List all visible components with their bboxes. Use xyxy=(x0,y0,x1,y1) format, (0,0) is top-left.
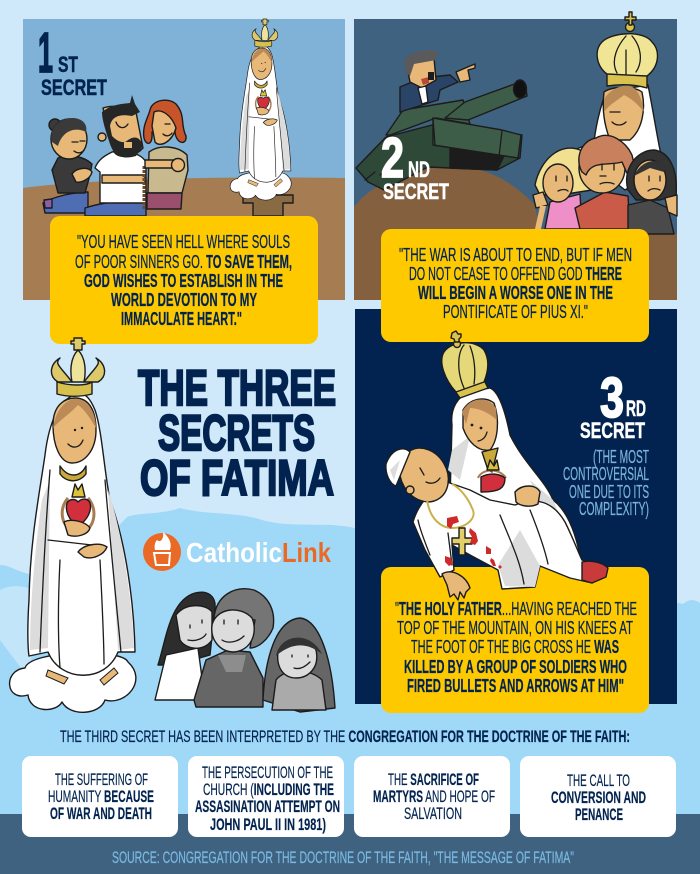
card: suffering of humanity: OF WAR AND DEATH xyxy=(50,805,152,823)
panel: second secret xyxy=(354,12,677,300)
card: persecution of the church: THE PERSECUTION OF THE xyxy=(202,764,333,782)
heading: 1st secret: 1 xyxy=(38,21,53,85)
heading: 1st secret: ST xyxy=(58,52,78,77)
callout: first secret quote xyxy=(50,216,318,344)
figure: large statue of Our Lady of Fatima xyxy=(10,338,136,712)
title: OF FATIMA xyxy=(140,450,334,506)
heart xyxy=(478,460,506,492)
card: sacrifice of martyrs: THE SACRIFICE OF xyxy=(388,771,479,789)
card: persecution of the church xyxy=(188,756,344,837)
text block: third secret note xyxy=(563,447,649,519)
icon: tank xyxy=(356,80,527,190)
logo: CatholicLink: Link xyxy=(282,537,331,568)
title: THE THREE xyxy=(138,360,336,416)
heading: 2nd secret: ND xyxy=(408,157,430,182)
text block: third secret note: (THE MOST xyxy=(593,447,649,467)
callout: first secret quote: OF POOR SINNERS GO. TO SAVE THEM, xyxy=(75,252,292,272)
figure: dark-haired girl xyxy=(627,150,677,234)
card: call to conversion xyxy=(520,756,676,837)
light hill patch xyxy=(0,586,35,680)
card: persecution of the church: JOHN PAUL II IN 1981) xyxy=(210,816,326,834)
figure: curly-haired child xyxy=(575,135,634,229)
heading: 3rd secret: 3 xyxy=(600,366,624,430)
card: call to conversion: THE CALL TO xyxy=(567,772,630,790)
heading: 2nd secret xyxy=(381,126,449,204)
icon: statue of Mary on pedestal xyxy=(230,19,293,216)
heading: 1st secret: SECRET xyxy=(41,75,107,100)
figure: Mary with crown xyxy=(574,12,665,190)
callout: third secret quote xyxy=(381,567,649,713)
figure: blonde girl xyxy=(533,148,592,229)
heading: 3rd secret: SECRET xyxy=(580,418,645,443)
figure: praying woman with dark hair xyxy=(43,118,92,213)
title xyxy=(138,360,336,506)
child: Lucia xyxy=(263,618,335,712)
card: call to conversion: CONVERSION AND xyxy=(551,789,646,807)
card: sacrifice of martyrs: SALVATION xyxy=(404,805,462,823)
card: sacrifice of martyrs: MARTYRS AND HOPE OF xyxy=(373,788,495,806)
text block: third secret note: COMPLEXITY) xyxy=(579,499,649,519)
callout: second secret quote: DO NOT CEASE TO OFFEND GOD THERE xyxy=(409,264,622,284)
figure: three shepherd children in greyscale xyxy=(155,589,335,712)
figure: dictator shouting from the tank xyxy=(400,50,475,112)
card: suffering of humanity: THE SUFFERING OF xyxy=(55,771,148,789)
background hills xyxy=(0,508,700,820)
callout: second secret quote: PONTIFICATE OF PIUS XI." xyxy=(443,302,588,322)
card: suffering of humanity: HUMANITY BECAUSE xyxy=(48,788,154,806)
logo: CatholicLink xyxy=(143,532,331,571)
heading: 2nd secret: SECRET xyxy=(383,179,449,204)
callout: first secret quote: IMMACULATE HEART." xyxy=(121,309,242,329)
card: call to conversion: PENANCE xyxy=(575,806,623,824)
child: Jacinta xyxy=(155,592,215,700)
card: persecution of the church: ASSASINATION ATTEMPT ON xyxy=(195,798,340,816)
heading: 3rd secret xyxy=(580,366,646,443)
footer band xyxy=(0,814,700,874)
callout: second secret quote xyxy=(381,229,649,342)
title: SECRETS xyxy=(158,405,315,461)
logo: CatholicLink: Catholic xyxy=(186,537,282,568)
panel: first secret xyxy=(23,19,345,300)
figure: praying red-haired woman xyxy=(144,100,188,209)
crown xyxy=(442,331,488,398)
child: Francisco xyxy=(194,589,274,707)
heading: 2nd secret: 2 xyxy=(381,126,404,190)
card: persecution of the church: CHURCH (INCLUDING THE xyxy=(203,781,334,799)
heading: 3rd secret: RD xyxy=(626,396,646,421)
callout: third secret quote: THE FOOT OF THE BIG CROSS HE WAS xyxy=(411,637,619,657)
card: sacrifice of martyrs xyxy=(354,756,510,837)
Pope xyxy=(386,439,608,600)
panel: third secret xyxy=(355,309,677,704)
callout: first secret quote: "YOU HAVE SEEN HELL WHERE SOULS xyxy=(77,232,290,252)
card: suffering of humanity xyxy=(22,756,178,837)
callout: first secret quote: GOD WISHES TO ESTABLISH IN THE xyxy=(84,271,283,291)
heading: 1st secret xyxy=(38,21,107,100)
figure: praying bearded man xyxy=(85,95,146,216)
figure: Mary holding the wounded Pope xyxy=(386,331,608,600)
callout: first secret quote: WORLD DEVOTION TO MY xyxy=(111,290,257,310)
Mary robes and hood xyxy=(448,388,580,570)
